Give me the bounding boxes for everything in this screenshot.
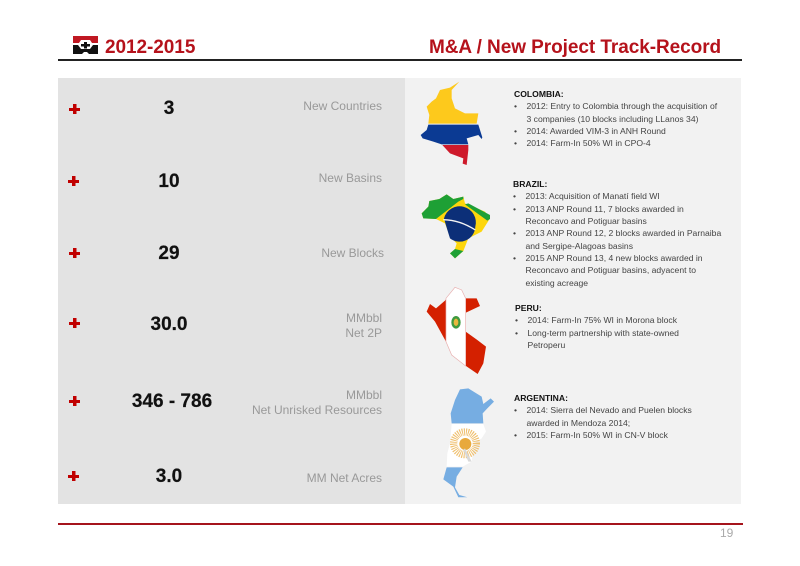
text block: Peru: • xyxy=(515,328,518,338)
metric row: net 2P: 30.0 xyxy=(150,314,187,335)
text block: Argentina: • xyxy=(514,405,517,415)
icon: Argentina flag map xyxy=(443,388,494,497)
text block: Peru: 2014: Farm-In 75% WI in Morona block xyxy=(528,315,677,325)
metric row: new basins xyxy=(68,171,382,192)
text block: Peru: PERU: xyxy=(515,303,542,313)
metric row: new countries xyxy=(69,98,382,119)
map flags xyxy=(420,82,494,498)
metric row: new blocks: New Blocks xyxy=(321,246,384,260)
icon: Brazil flag map xyxy=(422,194,490,258)
text block: Colombia: • xyxy=(514,101,517,111)
metric row: net unrisked resources xyxy=(69,388,382,416)
text block: Colombia: 3 companies (10 blocks including LLanos 34) xyxy=(526,114,698,124)
metric row: new countries: New Countries xyxy=(303,99,382,113)
text block: Brazil: 2013 ANP Round 12, 2 blocks awarded in Parnaiba xyxy=(526,228,721,238)
icon: Colombia flag map xyxy=(421,82,482,165)
text block: Colombia: • xyxy=(514,126,517,136)
text block: Brazil: 2015 ANP Round 13, 4 new blocks awarded in xyxy=(526,253,703,263)
text block: Brazil: and Sergipe-Alagoas basins xyxy=(526,241,633,251)
metric row: net unrisked resources: 346 - 786 xyxy=(132,391,212,412)
text block: Argentina: • xyxy=(514,430,517,440)
text block: Brazil: BRAZIL: xyxy=(513,179,547,189)
text block: Brazil: • xyxy=(513,204,516,214)
text block: Brazil xyxy=(513,179,722,288)
text block: Colombia: • xyxy=(514,138,517,148)
metric row: new blocks xyxy=(69,243,384,264)
metric row: new basins: New Basins xyxy=(319,171,382,185)
panel: metrics xyxy=(58,78,405,504)
metric row: net unrisked resources: MMbbl xyxy=(346,388,382,402)
page number: 19 xyxy=(720,526,733,540)
text block: Peru: • xyxy=(515,315,518,325)
text block: Peru: Long-term partnership with state-owned xyxy=(528,328,679,338)
title: track record: M&A / New Project Track-Record xyxy=(429,37,721,58)
text block: Colombia: 2012: Entry to Colombia through the acquisition of xyxy=(526,101,717,111)
text block: Colombia: 2014: Awarded VIM-3 in ANH Round xyxy=(526,126,666,136)
header logo xyxy=(73,36,98,54)
header rule xyxy=(58,59,742,60)
text block: Brazil: 2013 ANP Round 11, 7 blocks awarded in xyxy=(526,204,684,214)
text block: Colombia: COLOMBIA: xyxy=(514,89,564,99)
metric row: new countries: 3 xyxy=(164,98,174,119)
text block: Brazil: • xyxy=(513,191,516,201)
metric row: new basins: 10 xyxy=(158,171,180,192)
metric row: net 2P: Net 2P xyxy=(345,326,382,340)
text block: Argentina xyxy=(514,393,692,440)
text block: Colombia xyxy=(514,89,718,148)
text block: Colombia: 2014: Farm-In 50% WI in CPO-4 xyxy=(526,138,651,148)
text block: Argentina: ARGENTINA: xyxy=(514,393,568,403)
text block: Brazil: • xyxy=(513,253,516,263)
metric row: net acres: 3.0 xyxy=(156,466,182,487)
text block: Brazil: existing acreage xyxy=(526,278,588,288)
metric row: net acres: MM Net Acres xyxy=(307,471,382,485)
text block: Argentina: 2014: Sierra del Nevado and Puelen blocks xyxy=(526,405,692,415)
footer rule xyxy=(58,523,743,525)
title: years: 2012-2015 xyxy=(105,37,195,58)
text block: Peru: Petroperu xyxy=(528,340,565,350)
metric row: new blocks: 29 xyxy=(158,243,180,264)
text block: Peru xyxy=(515,303,679,350)
text block: Brazil: Reconcavo and Potiguar basins xyxy=(526,216,647,226)
text block: Argentina: 2015: Farm-In 50% WI in CN-V block xyxy=(526,430,668,440)
metric row: net 2P: MMbbl xyxy=(346,311,382,325)
icon: Peru flag map xyxy=(427,287,486,374)
text block: Brazil: 2013: Acquisition of Manatí field WI xyxy=(526,191,660,201)
metric row: net 2P xyxy=(69,311,382,340)
text block: Brazil: Reconcavo and Potiguar basins, adyacent to xyxy=(526,265,696,275)
metric row: net unrisked resources: Net Unrisked Resources xyxy=(252,402,382,416)
text block: Argentina: awarded in Mendoza 2014; xyxy=(526,418,630,428)
text block: Brazil: • xyxy=(513,228,516,238)
panel: countries xyxy=(405,78,741,504)
metric row: net acres xyxy=(68,466,382,487)
